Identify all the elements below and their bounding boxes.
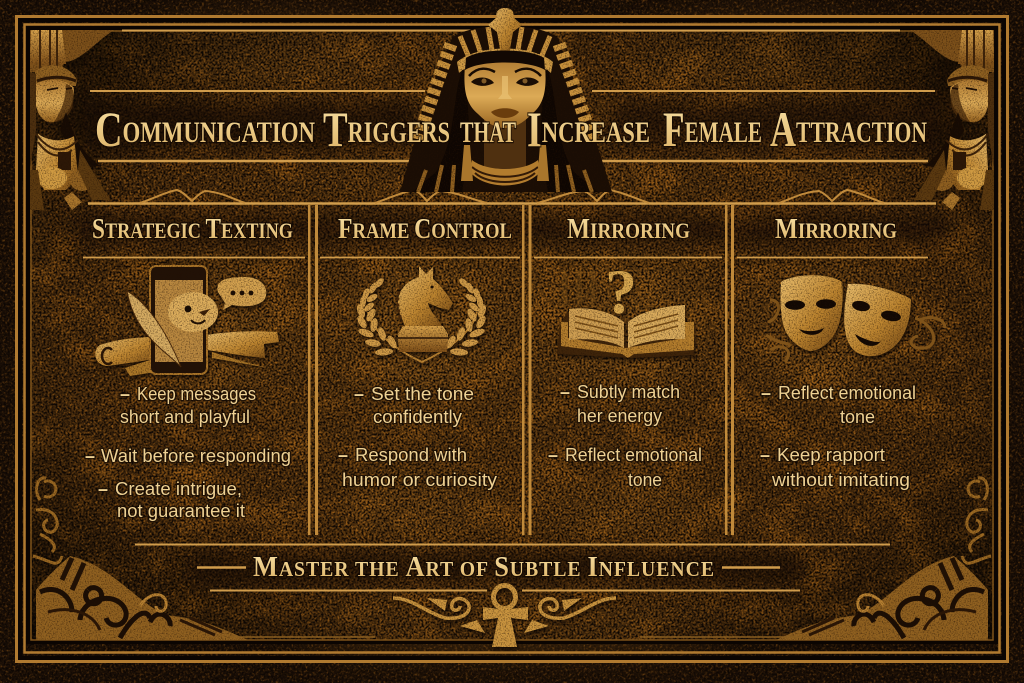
bullets: frame control: Respond with [355,445,467,465]
figure: right queen [910,30,994,210]
figure: left queen [30,30,114,210]
bullets: mirroring two: – [760,445,770,465]
column headings: MIRRORING [775,214,897,245]
bullets: mirroring two [760,383,916,490]
icon: open book and question mark: ? [605,256,637,327]
bullets: frame control: Set the tone [371,384,474,404]
bullets: mirroring two: – [761,383,771,403]
bullets: mirroring one: tone [628,470,662,490]
bullets: frame control [338,384,497,490]
bullets: strategic texting: – [98,479,108,499]
column dividers [308,205,734,535]
bullets: frame control: – [354,384,364,404]
title: C [95,101,122,157]
bullets: strategic texting: – [120,384,130,404]
corner ornament: bottom left [33,478,248,640]
bullets: strategic texting [85,384,291,521]
footer rules [135,544,890,637]
column headings: STRATEGIC TEXTING [92,214,293,245]
bullets: strategic texting: Keep messages [137,384,256,404]
title: I [527,101,542,157]
icon: chess knight and laurel [355,266,488,362]
title: T [323,101,348,157]
bullets: strategic texting: Create intrigue, [115,479,242,499]
bullets: mirroring one: her energy [577,406,662,426]
bullets: mirroring one: – [548,445,558,465]
subtitle: MASTER THE ART OF SUBTLE INFLUENCE [253,552,715,583]
bullets: mirroring one: Reflect emotional [565,445,702,465]
dark shading behind text [45,40,979,581]
title: TTRACTION [796,116,927,149]
title: EMALE [685,116,762,149]
title: A [770,101,796,157]
bullets: frame control: – [338,445,348,465]
title [95,101,927,157]
bullets: mirroring two: Reflect emotional [778,383,916,403]
bullets: mirroring two: Keep rapport [777,445,885,465]
title: OMMUNICATION [122,116,315,149]
title: THAT [460,116,516,149]
column headings: FRAME CONTROL [338,214,512,245]
heading rules [83,256,928,258]
title: NCREASE [542,116,650,149]
title: RIGGERS [348,116,450,149]
bullets: frame control: confidently [373,407,462,427]
bullets: strategic texting: not guarantee it [117,501,245,521]
column headings: MIRRORING [567,214,690,245]
bullets: mirroring two: without imitating [771,470,910,490]
ornament: header flourishes [140,190,884,203]
figure: central pharaoh [400,8,612,192]
bullets: frame control: humor or curiosity [342,470,497,490]
icon: phone with scrolls [95,266,279,376]
pharaoh headdress [400,8,612,192]
bullets: mirroring two: tone [840,407,875,427]
bullets: mirroring one: – [560,382,570,402]
column headings [92,214,897,245]
icon: ankh with wings [393,586,616,647]
bullets: strategic texting: Wait before responding [101,446,291,466]
bullets: strategic texting: – [85,446,95,466]
bullets: strategic texting: short and playful [120,407,250,427]
header rules [88,30,936,204]
bullets: mirroring one [548,382,702,490]
bullets: mirroring one: Subtly match [577,382,680,402]
icon: open book and question mark [557,256,695,358]
icon: drama masks [766,275,945,362]
pharaoh face [461,50,549,186]
title: F [663,101,685,157]
corner ornament: bottom right [776,478,991,640]
